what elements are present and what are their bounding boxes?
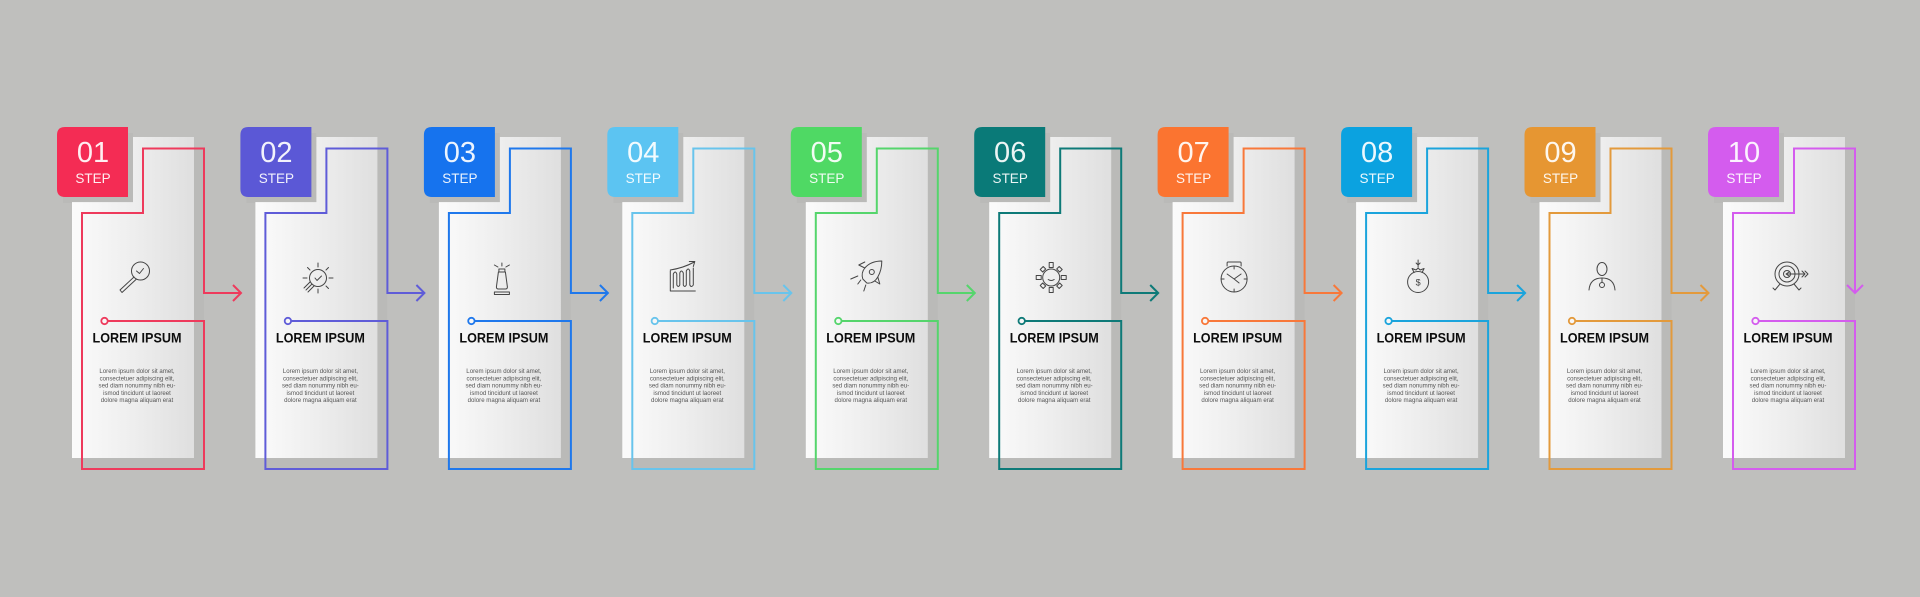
body text: consectetuer adipiscing elit, [100,375,175,382]
icon: magnifier with check [120,262,150,292]
heading: LOREM IPSUM [1193,330,1282,346]
step badge [240,127,316,203]
step badge: 07 [1177,137,1210,169]
card [1540,137,1672,469]
body text: ismod tincidunt ut laoreet [653,390,721,397]
body text: sed diam nonummy nibh eu- [282,383,359,390]
step badge: 01 [77,137,109,169]
card [989,137,1121,469]
body text: consectetuer adipiscing elit, [650,375,725,382]
icon: light bulb with check [303,263,333,293]
body text: ismod tincidunt ut laoreet [1387,390,1455,397]
step badge: 03 [444,137,476,169]
heading: LOREM IPSUM [826,330,915,346]
body text: Lorem ipsum dolor sit amet, [466,368,542,375]
step badge: STEP [75,171,111,186]
body text: sed diam nonummy nibh eu- [1566,383,1643,390]
step 7 [1158,127,1342,469]
body text: dolore magna aliquam erat [1752,397,1825,404]
card [1723,137,1855,469]
heading: LOREM IPSUM [1377,330,1466,346]
icon: money bag [1408,260,1429,292]
body text: dolore magna aliquam erat [284,397,357,404]
card [806,137,938,469]
connector line and arrow [82,148,241,469]
body text: ismod tincidunt ut laoreet [837,390,905,397]
card [1173,137,1305,469]
step badge: 05 [811,137,843,169]
heading: LOREM IPSUM [92,330,182,346]
icon: growth chart [670,262,695,291]
body text: Lorem ipsum dolor sit amet, [833,368,909,375]
body text: sed diam nonummy nibh eu- [465,383,542,390]
icon: rocket [851,261,882,291]
heading: LOREM IPSUM [1744,330,1832,346]
step 9 [1524,127,1708,469]
step 1 [57,127,241,469]
step badge [57,127,133,203]
step badge: STEP [809,171,844,186]
body text: dolore magna aliquam erat [651,397,724,404]
step badge [424,127,500,203]
body text: consectetuer adipiscing elit, [1567,375,1642,382]
icon: person [1589,262,1615,290]
body text: Lorem ipsum dolor sit amet, [1384,368,1459,375]
step badge: STEP [1176,171,1211,186]
connector line and arrow [632,148,791,469]
card [622,137,754,469]
step 3 [424,127,608,469]
body text: sed diam nonummy nibh eu- [1016,383,1093,390]
body text: Lorem ipsum dolor sit amet, [1567,368,1642,375]
body text: Lorem ipsum dolor sit amet, [1017,368,1092,375]
step 2 [240,127,424,469]
body text: Lorem ipsum dolor sit amet, [99,368,175,375]
body text: consectetuer adipiscing elit, [1017,375,1092,382]
connector line and arrow [265,148,424,469]
body text: sed diam nonummy nibh eu- [1383,383,1460,390]
step 4 [607,127,791,469]
step badge: STEP [993,171,1028,186]
body text: consectetuer adipiscing elit, [833,375,909,382]
connector line and arrow [1183,148,1342,469]
step badge: 09 [1544,137,1577,169]
body text: consectetuer adipiscing elit, [466,375,542,382]
connector line and arrow [1366,148,1525,469]
body text: dolore magna aliquam erat [1018,397,1091,404]
step badge: 10 [1728,137,1760,169]
heading: LOREM IPSUM [459,330,548,346]
step badge [1158,127,1234,203]
step badge [1524,127,1600,203]
step badge [607,127,683,203]
body text: sed diam nonummy nibh eu- [1199,383,1276,390]
body text: dolore magna aliquam erat [468,397,540,404]
icon: money bag: $ [1416,278,1421,288]
card [439,137,571,469]
step 5 [791,127,975,469]
body text: dolore magna aliquam erat [835,397,907,404]
icon: stopwatch [1221,262,1247,292]
connector line and downward arrow [1733,148,1863,469]
body text: Lorem ipsum dolor sit amet, [650,368,725,375]
body text: consectetuer adipiscing elit, [1384,375,1459,382]
step badge [1341,127,1417,203]
body text: dolore magna aliquam erat [1568,397,1641,404]
step badge [974,127,1050,203]
card [1356,137,1488,469]
body text: consectetuer adipiscing elit, [1200,375,1275,382]
body text: ismod tincidunt ut laoreet [1204,390,1272,397]
step badge: STEP [1543,171,1578,186]
body text: sed diam nonummy nibh eu- [1750,383,1826,390]
body text: ismod tincidunt ut laoreet [1754,390,1822,397]
connector line and arrow [449,148,608,469]
connector line and arrow [816,148,975,469]
step badge [791,127,867,203]
heading: LOREM IPSUM [643,330,732,346]
step badge: 06 [994,137,1026,169]
step badge: STEP [259,171,294,186]
icon: beacon tower [494,263,509,294]
body text: dolore magna aliquam erat [1201,397,1274,404]
body text: ismod tincidunt ut laoreet [1020,390,1088,397]
step badge: 04 [627,137,659,169]
body text: consectetuer adipiscing elit, [283,375,358,382]
body text: ismod tincidunt ut laoreet [103,390,171,397]
step badge: 02 [260,137,293,169]
card [255,137,387,469]
step badge [1708,127,1784,203]
step 10 [1708,127,1863,469]
icon: target with arrow [1773,262,1808,290]
step badge: STEP [1726,171,1762,186]
body text: Lorem ipsum dolor sit amet, [283,368,358,375]
heading: LOREM IPSUM [276,330,365,346]
body text: Lorem ipsum dolor sit amet, [1200,368,1275,375]
body text: consectetuer adipiscing elit, [1751,375,1826,382]
card [72,137,204,469]
heading: LOREM IPSUM [1560,330,1649,346]
connector line and arrow [999,148,1158,469]
heading: LOREM IPSUM [1010,330,1099,346]
body text: ismod tincidunt ut laoreet [287,390,355,397]
body text: ismod tincidunt ut laoreet [470,390,538,397]
step 6 [974,127,1158,469]
step badge: 08 [1361,137,1393,169]
body text: Lorem ipsum dolor sit amet, [1750,368,1826,375]
connector line and arrow [1550,148,1708,469]
body text: ismod tincidunt ut laoreet [1571,390,1639,397]
step 8 [1341,127,1525,469]
body text: dolore magna aliquam erat [1385,397,1458,404]
body text: dolore magna aliquam erat [101,397,174,404]
step badge: STEP [442,171,478,186]
body text: sed diam nonummy nibh eu- [832,383,909,390]
body text: sed diam nonummy nibh eu- [99,383,175,390]
step badge: STEP [626,171,661,186]
step badge: STEP [1359,171,1395,186]
body text: sed diam nonummy nibh eu- [649,383,726,390]
icon: sun gear [1036,262,1066,292]
